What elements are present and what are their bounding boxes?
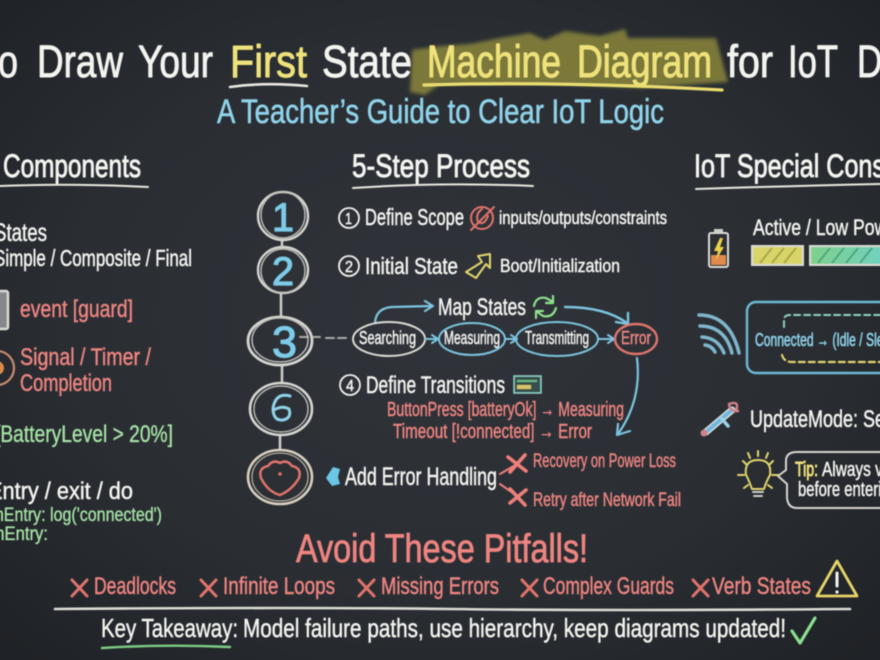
icon: scope target [471, 207, 494, 230]
event types: Completion [20, 370, 112, 397]
title word: State: State [322, 36, 412, 87]
step 1 [339, 204, 667, 230]
number badge 1 [339, 208, 359, 228]
step 4 [340, 372, 624, 443]
number badge 2: 2 [345, 259, 353, 276]
number badge 2 [339, 256, 359, 276]
step circle 1: 1 [272, 196, 294, 240]
key takeaway [101, 613, 815, 648]
pitfall: missing errors [359, 573, 499, 600]
title [0, 29, 880, 95]
bar: active [752, 246, 803, 265]
icon: initial arrow [466, 254, 490, 278]
branch: recovery [500, 455, 526, 474]
state: Error: Error [621, 328, 651, 348]
icon: transition table [514, 376, 541, 393]
state: Error [615, 324, 657, 354]
heading: Avoid These Pitfalls: Avoid These Pitfalls! [296, 527, 588, 571]
icon: wrench [700, 403, 738, 436]
event guard: event [guard] [20, 296, 133, 323]
state: Measuring: Measuring [444, 328, 500, 348]
dashed loop top [784, 315, 880, 327]
step 2 [339, 253, 620, 279]
pitfall: complex guards: Complex Guards [543, 573, 674, 600]
arrow: Searching to Map States [375, 301, 433, 323]
bar: low power [810, 246, 880, 265]
pitfall: deadlocks [72, 573, 176, 600]
pitfall: infinite loops [201, 573, 335, 600]
underline: First [230, 84, 307, 87]
transition example 2: Timeout [!connected] → Error [393, 421, 592, 443]
step 5 label: Add Error Handling [345, 463, 497, 491]
step circle 3 [248, 317, 312, 367]
pitfall: missing errors: Missing Errors [381, 573, 499, 600]
arrow: Transmitting to Error [599, 335, 614, 343]
arrow: Searching to Measuring [425, 335, 438, 343]
pitfall: infinite loops: Infinite Loops [223, 573, 335, 600]
connector from step 3 [300, 337, 350, 338]
subtitle: A Teacher’s Guide to Clear IoT Logic [217, 93, 664, 131]
number badge 4 [340, 375, 360, 395]
step 2 label: Initial State [365, 253, 458, 279]
yellow chalk highlight [410, 29, 728, 95]
icon: refresh loop [534, 296, 556, 318]
step circle 1 [258, 192, 308, 240]
step 3: state map [300, 294, 657, 435]
title word: for: for [727, 36, 773, 87]
state: Searching: Searching [359, 328, 416, 348]
step 1 label: Define Scope [365, 204, 464, 230]
state: Transmitting [516, 322, 598, 356]
key takeaway label: Key Takeaway: [101, 613, 238, 643]
tip bubble [778, 452, 880, 508]
tip label: Tip: [795, 459, 818, 481]
pitfall: verb states: Verb States [712, 573, 811, 600]
dashed loop bottom [782, 355, 880, 362]
transition example 1: ButtonPress [batteryOk] → Measuring [387, 399, 624, 421]
number badge 1: 1 [345, 211, 352, 228]
panel: IoT special considerations [694, 148, 880, 508]
icon: light bulb [738, 451, 778, 496]
branch: retry [500, 484, 526, 505]
step circle: heart [248, 450, 312, 504]
number badge 4: 4 [346, 378, 354, 395]
pitfalls row [72, 561, 857, 600]
step circle 6 [250, 383, 312, 435]
step circle 2 [258, 247, 308, 294]
arrow: Map States to Error [565, 307, 628, 324]
heading: 5-Step Process: 5-Step Process [352, 148, 530, 184]
event types [20, 344, 151, 397]
step 5: error handling [326, 451, 681, 511]
title word: Machine: Machine [427, 36, 561, 87]
step 1 detail: inputs/outputs/constraints [499, 208, 667, 228]
panel: key components [0, 148, 192, 545]
icon: battery [709, 229, 728, 267]
icon: check mark [792, 618, 815, 643]
pitfall: deadlocks: Deadlocks [94, 573, 176, 600]
state: Searching [353, 322, 425, 356]
pitfall: verb states [693, 573, 811, 600]
step circles column [248, 192, 312, 504]
panel: 5-step process [248, 148, 681, 511]
title word: IoT: IoT [788, 36, 838, 87]
underline: Machine Diagram [424, 84, 722, 90]
title word: First: First [230, 36, 307, 87]
recovery label: Recovery on Power Loss [533, 451, 676, 472]
step circle 3: 3 [272, 318, 297, 367]
title word: Your: Your [138, 36, 213, 87]
arrow: Measuring to Transmitting [505, 335, 517, 343]
event types: Signal / Timer / [20, 344, 151, 371]
step 4 label: Define Transitions [366, 372, 505, 399]
connected states box [747, 302, 880, 373]
step 2 detail: Boot/Initialization [500, 256, 620, 276]
key takeaway underline [102, 646, 230, 648]
icon: signal ring [0, 351, 14, 385]
icon: transition square [0, 291, 8, 329]
arrow: Error down to transitions [617, 358, 638, 435]
step circle 2: 2 [272, 250, 294, 294]
heading: Components: Components [3, 148, 141, 184]
pitfall: complex guards [522, 573, 674, 600]
retry label: Retry after Network Fail [533, 490, 681, 511]
state: Measuring [439, 323, 505, 355]
state types: Simple / Composite / Final [0, 245, 192, 271]
state: Transmitting: Transmitting [525, 328, 589, 348]
title word: Diagram: Diagram [577, 36, 712, 87]
title word: Draw: Draw [37, 36, 123, 87]
Map States label: Map States [438, 294, 526, 321]
guard example: [BatteryLevel > 20%] [0, 421, 173, 448]
icon: blue chalk mark [326, 467, 340, 486]
icon: wifi [699, 315, 739, 353]
icon: warning triangle [817, 561, 857, 596]
